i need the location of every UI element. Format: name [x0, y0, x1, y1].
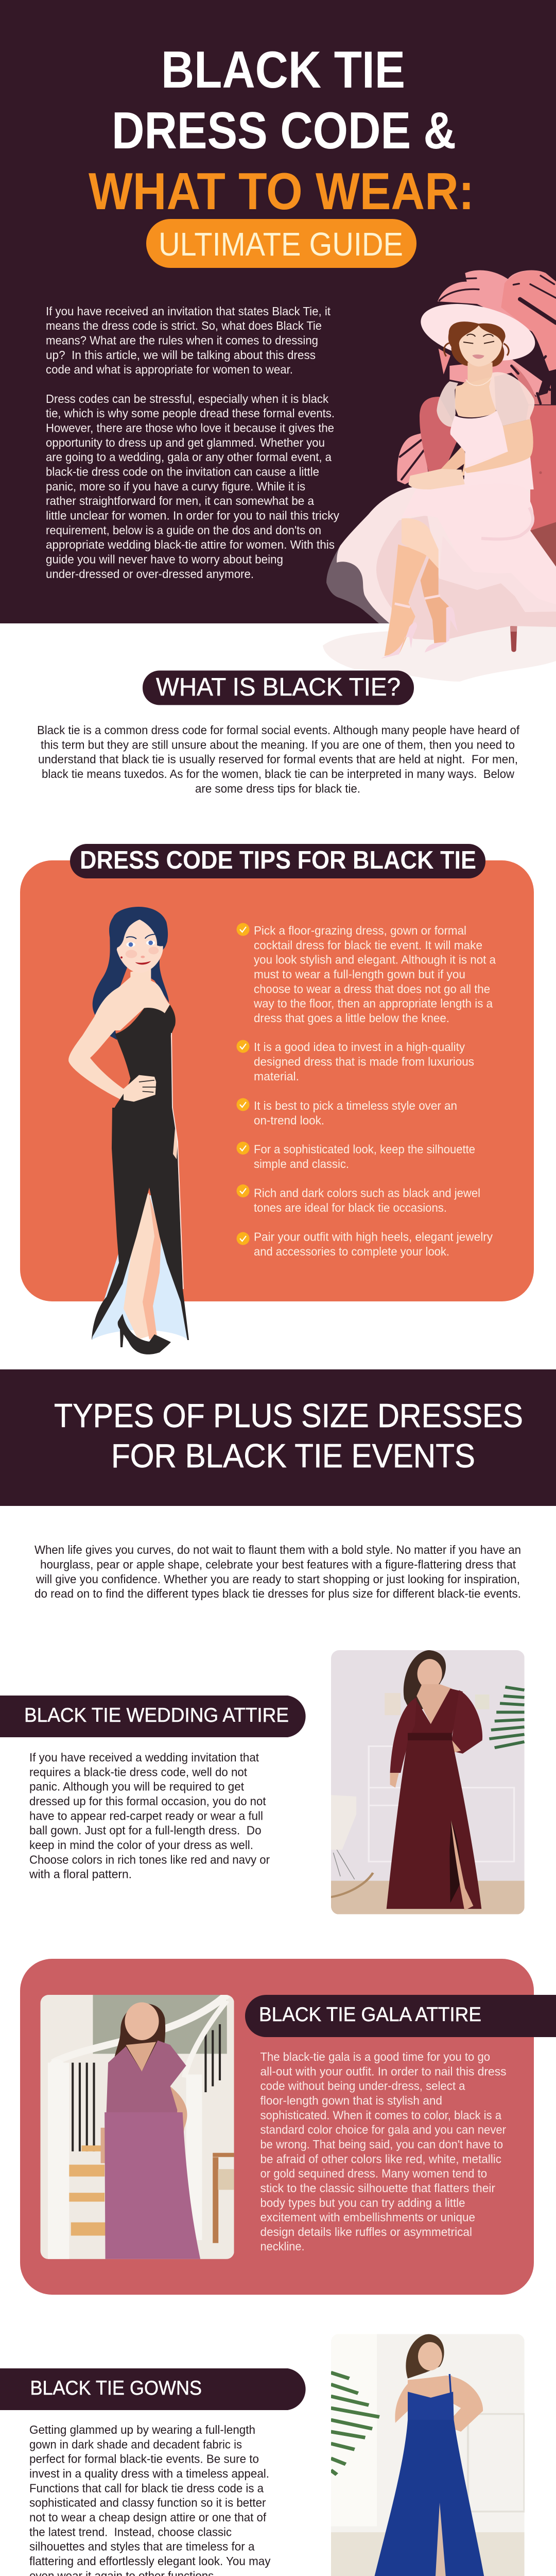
text block: plus size intro: will give you confidence. Whether you are ready to start shopping or just looking for inspiration, — [36, 1572, 520, 1586]
text block: what is black tie: Black tie is a common dress code for formal social events. Although many people have heard of — [37, 723, 519, 737]
tip 6: and accessories to complete your look. — [254, 1245, 449, 1258]
body text: perfect for formal black-tie events. Be sure to — [29, 2452, 259, 2466]
intro text: means the dress code is strict. So, what does Black Tie — [46, 319, 322, 332]
title: DRESS CODE & — [112, 102, 456, 160]
body text: ball gown. Just opt for a full-length dress. Do — [29, 1824, 262, 1837]
tip 1: way to the floor, then an appropriate length is a — [253, 997, 493, 1010]
body text: flattering and effortlessly elegant look. You may — [29, 2554, 271, 2568]
body text: be wrong. That being said, you can don't have to — [260, 2138, 503, 2151]
section banner: types of plus size dresses — [0, 1369, 556, 1506]
body text: with a floral pattern. — [29, 1868, 132, 1881]
body text: or gold sequined dress. Many women tend to — [260, 2167, 487, 2180]
tip 5 — [237, 1184, 480, 1214]
body text: invest in a quality dress with a timeless appeal. — [29, 2467, 269, 2480]
body text: Getting glammed up by wearing a full-length — [29, 2423, 255, 2436]
intro text: panic, more so if you have a curvy figure. While it is — [46, 480, 305, 493]
intro text: black-tie dress code on the invitation can cause a little — [46, 465, 319, 478]
body text: silhouettes and styles that are timeless for a — [29, 2540, 255, 2553]
section: black tie wedding attire — [0, 1650, 525, 1914]
text block: what is black tie: understand that black tie is usually reserved for formal events that are held at night. For men, — [38, 753, 518, 766]
legs and heels — [381, 518, 458, 658]
gown overlap at lap — [443, 483, 530, 515]
body text: body types but you can try adding a little — [260, 2196, 465, 2209]
intro text: rather straightforward for men, it can somewhat be a — [46, 494, 315, 507]
section heading: FOR BLACK TIE EVENTS — [111, 1437, 475, 1475]
tip 5: tones are ideal for black tie occasions. — [254, 1201, 447, 1214]
text block: what is black tie: black tie means tuxedos. As for the women, black tie can be interpreted in many ways. Below — [42, 767, 515, 781]
tip 1: Pick a floor-grazing dress, gown or formal — [254, 924, 466, 937]
tip 1: must to wear a full-length gown but if you — [254, 968, 465, 981]
tip 3: on-trend look. — [254, 1113, 324, 1127]
tip 2: designed dress that is made from luxurious — [254, 1055, 474, 1069]
section: black tie gowns — [0, 2334, 525, 2576]
illustration: woman in black strapless gown — [68, 907, 189, 1360]
tip 3: It is best to pick a timeless style over an — [254, 1099, 457, 1112]
body text: not to wear a cheap design attire or one that of — [29, 2511, 266, 2524]
body text: be afraid of other colors like red, white, metallic — [260, 2152, 501, 2165]
title — [89, 41, 474, 221]
intro text: means? What are the rules when it comes to dressing — [46, 334, 318, 347]
heading pill: BLACK TIE WEDDING ATTIRE — [24, 1704, 289, 1726]
body text: sophisticated and classy function so it is better — [29, 2496, 266, 2510]
skirt — [92, 1108, 189, 1340]
body text: standard color choice for gala and you can never — [260, 2123, 506, 2137]
heading pill — [0, 2368, 306, 2410]
intro text — [46, 304, 339, 581]
tip 4: For a sophisticated look, keep the silhouette — [254, 1143, 475, 1156]
text block: plus size intro — [34, 1543, 521, 1600]
tip 1: you look stylish and elegant. Although it is not a — [254, 953, 496, 967]
hero and what is black tie section — [0, 0, 556, 795]
body text: all-out with your outfit. In order to nail this dress — [260, 2064, 507, 2078]
body text: sophisticated. When it comes to color, black is a — [260, 2108, 502, 2122]
intro text: tie, which is why some people dread these formal events. — [46, 406, 335, 420]
tip 4 — [237, 1142, 475, 1171]
intro text: However, there are those who love it because it gives the — [46, 421, 334, 435]
intro text: appropriate wedding black-tie attire for women. With this — [46, 538, 335, 551]
body text — [29, 2423, 271, 2576]
body text: Functions that call for black tie dress code is a — [29, 2481, 264, 2495]
upper body — [68, 907, 176, 1113]
body text: the latest trend. Instead, choose classic — [29, 2525, 232, 2538]
tip 6 — [237, 1230, 493, 1258]
panel: black tie gala attire — [20, 1959, 556, 2295]
tip 6: Pair your outfit with high heels, elegant jewelry — [254, 1230, 493, 1244]
panel: hero banner — [0, 0, 556, 623]
tip 1: cocktail dress for black tie event. It will make — [254, 938, 482, 952]
body text: requires a black-tie dress code, well do not — [29, 1765, 247, 1778]
body text: dressed up for this formal occasion, you do not — [29, 1794, 266, 1808]
tip 4: simple and classic. — [254, 1157, 349, 1171]
body text: have to appear red-carpet ready or wear a full — [29, 1809, 263, 1822]
body text: neckline. — [260, 2240, 305, 2253]
heading pill: dress code tips: DRESS CODE TIPS FOR BLACK TIE — [80, 846, 476, 874]
ground curve — [92, 1330, 189, 1360]
illustration: woman in pink gown and hat on armchair — [323, 270, 556, 682]
heading pill: BLACK TIE GOWNS — [30, 2377, 202, 2399]
intro text: If you have received an invitation that states Black Tie, it — [46, 304, 331, 318]
body text: The black-tie gala is a good time for you to go — [260, 2050, 490, 2063]
intro text: under-dressed or over-dressed anymore. — [46, 567, 254, 581]
bodice, arms and head — [408, 294, 541, 489]
text block: plus size intro: hourglass, pear or apple shape, celebrate your best features with a figure-flattering dress that — [40, 1558, 516, 1571]
tip 2: It is a good idea to invest in a high-quality — [254, 1040, 465, 1054]
tip 3 — [237, 1098, 457, 1127]
section heading — [54, 1397, 523, 1475]
panel: dress code tips — [20, 844, 534, 1301]
subtitle pill — [146, 219, 416, 268]
body text — [29, 1751, 270, 1881]
intro text: code and what is appropriate for women to wear. — [46, 363, 293, 376]
palm leaves and chair back — [397, 270, 556, 489]
body text: If you have received a wedding invitation that — [29, 1751, 259, 1764]
intro text: little unclear for women. In order for you to nail this tricky — [46, 509, 339, 522]
intro text: up? In this article, we will be talking about this dress — [46, 348, 316, 362]
body text: stick to the classic silhouette that flatters their — [260, 2181, 495, 2195]
chair lower section and leg — [510, 489, 556, 652]
photo: mauve chiffon gown — [41, 1995, 234, 2259]
body text: Choose colors in rich tones like red and navy or — [29, 1853, 270, 1866]
heading pill: BLACK TIE GALA ATTIRE — [259, 2004, 481, 2026]
photo: royal blue gown — [331, 2334, 525, 2576]
body text: gown in dark shade and decadent fabric is — [29, 2437, 242, 2451]
body text — [260, 2050, 507, 2253]
gown skirt — [326, 546, 412, 629]
body text: panic. Although you will be required to get — [29, 1780, 244, 1793]
types of dresses intro and wedding section — [0, 1369, 556, 1914]
body text: keep in mind the color of your dress as well. — [29, 1838, 253, 1852]
floor shadow blob — [323, 618, 556, 682]
intro text: opportunity to dress up and get glammed. Whether you — [46, 436, 325, 449]
text block: what is black tie: are some dress tips for black tie. — [195, 782, 360, 795]
text block: what is black tie — [37, 723, 519, 795]
intro text: requirement, below is a guide on the dos and don'ts on — [46, 523, 321, 537]
body text: excitement with embellishments or unique — [260, 2211, 475, 2224]
gala and gowns section — [0, 1959, 556, 2576]
section heading: TYPES OF PLUS SIZE DRESSES — [54, 1397, 523, 1434]
body text: code without being under-dress, select a — [260, 2079, 465, 2093]
body text: floor-length gown that is stylish and — [260, 2094, 442, 2107]
text block: plus size intro: When life gives you curves, do not wait to flaunt them with a bold style. No matter if you have an — [34, 1543, 521, 1556]
subtitle pill: ULTIMATE GUIDE — [159, 226, 403, 263]
white rim light on the gown edge — [171, 1033, 183, 1289]
heading pill: what is black tie: WHAT IS BLACK TIE? — [156, 673, 401, 701]
tip 2: material. — [254, 1070, 299, 1083]
text block: plus size intro: do read on to find the different types black tie dresses for plus size for different black-tie events. — [34, 1587, 521, 1600]
tip 2 — [237, 1040, 474, 1083]
dress code tips section — [20, 844, 534, 1354]
intro text: Dress codes can be stressful, especially when it is black — [46, 392, 328, 405]
intro text: are going to a wedding, gala or any other formal event, a — [46, 450, 332, 464]
tip 1 — [237, 923, 496, 1025]
body text: design details like ruffles or asymmetrical — [260, 2225, 472, 2239]
legs — [124, 1193, 154, 1340]
photo: burgundy long sleeve gown — [331, 1650, 525, 1914]
long skirt lining — [92, 1195, 189, 1340]
heading pill — [245, 1995, 556, 2037]
title: WHAT TO WEAR: — [89, 163, 474, 221]
intro text: guide you will never have to worry about being — [46, 552, 283, 566]
title: BLACK TIE — [161, 41, 405, 99]
text block: what is black tie: this term but they are still unsure about the meaning. If you are one of them, then you need to — [41, 738, 515, 751]
tip 1: choose to wear a dress that does not go all the — [254, 982, 490, 995]
tip 5: Rich and dark colors such as black and jewel — [254, 1186, 480, 1199]
tip 1: dress that goes a little below the knee. — [254, 1011, 449, 1025]
black heels — [118, 1314, 171, 1354]
heading pill — [0, 1696, 306, 1737]
